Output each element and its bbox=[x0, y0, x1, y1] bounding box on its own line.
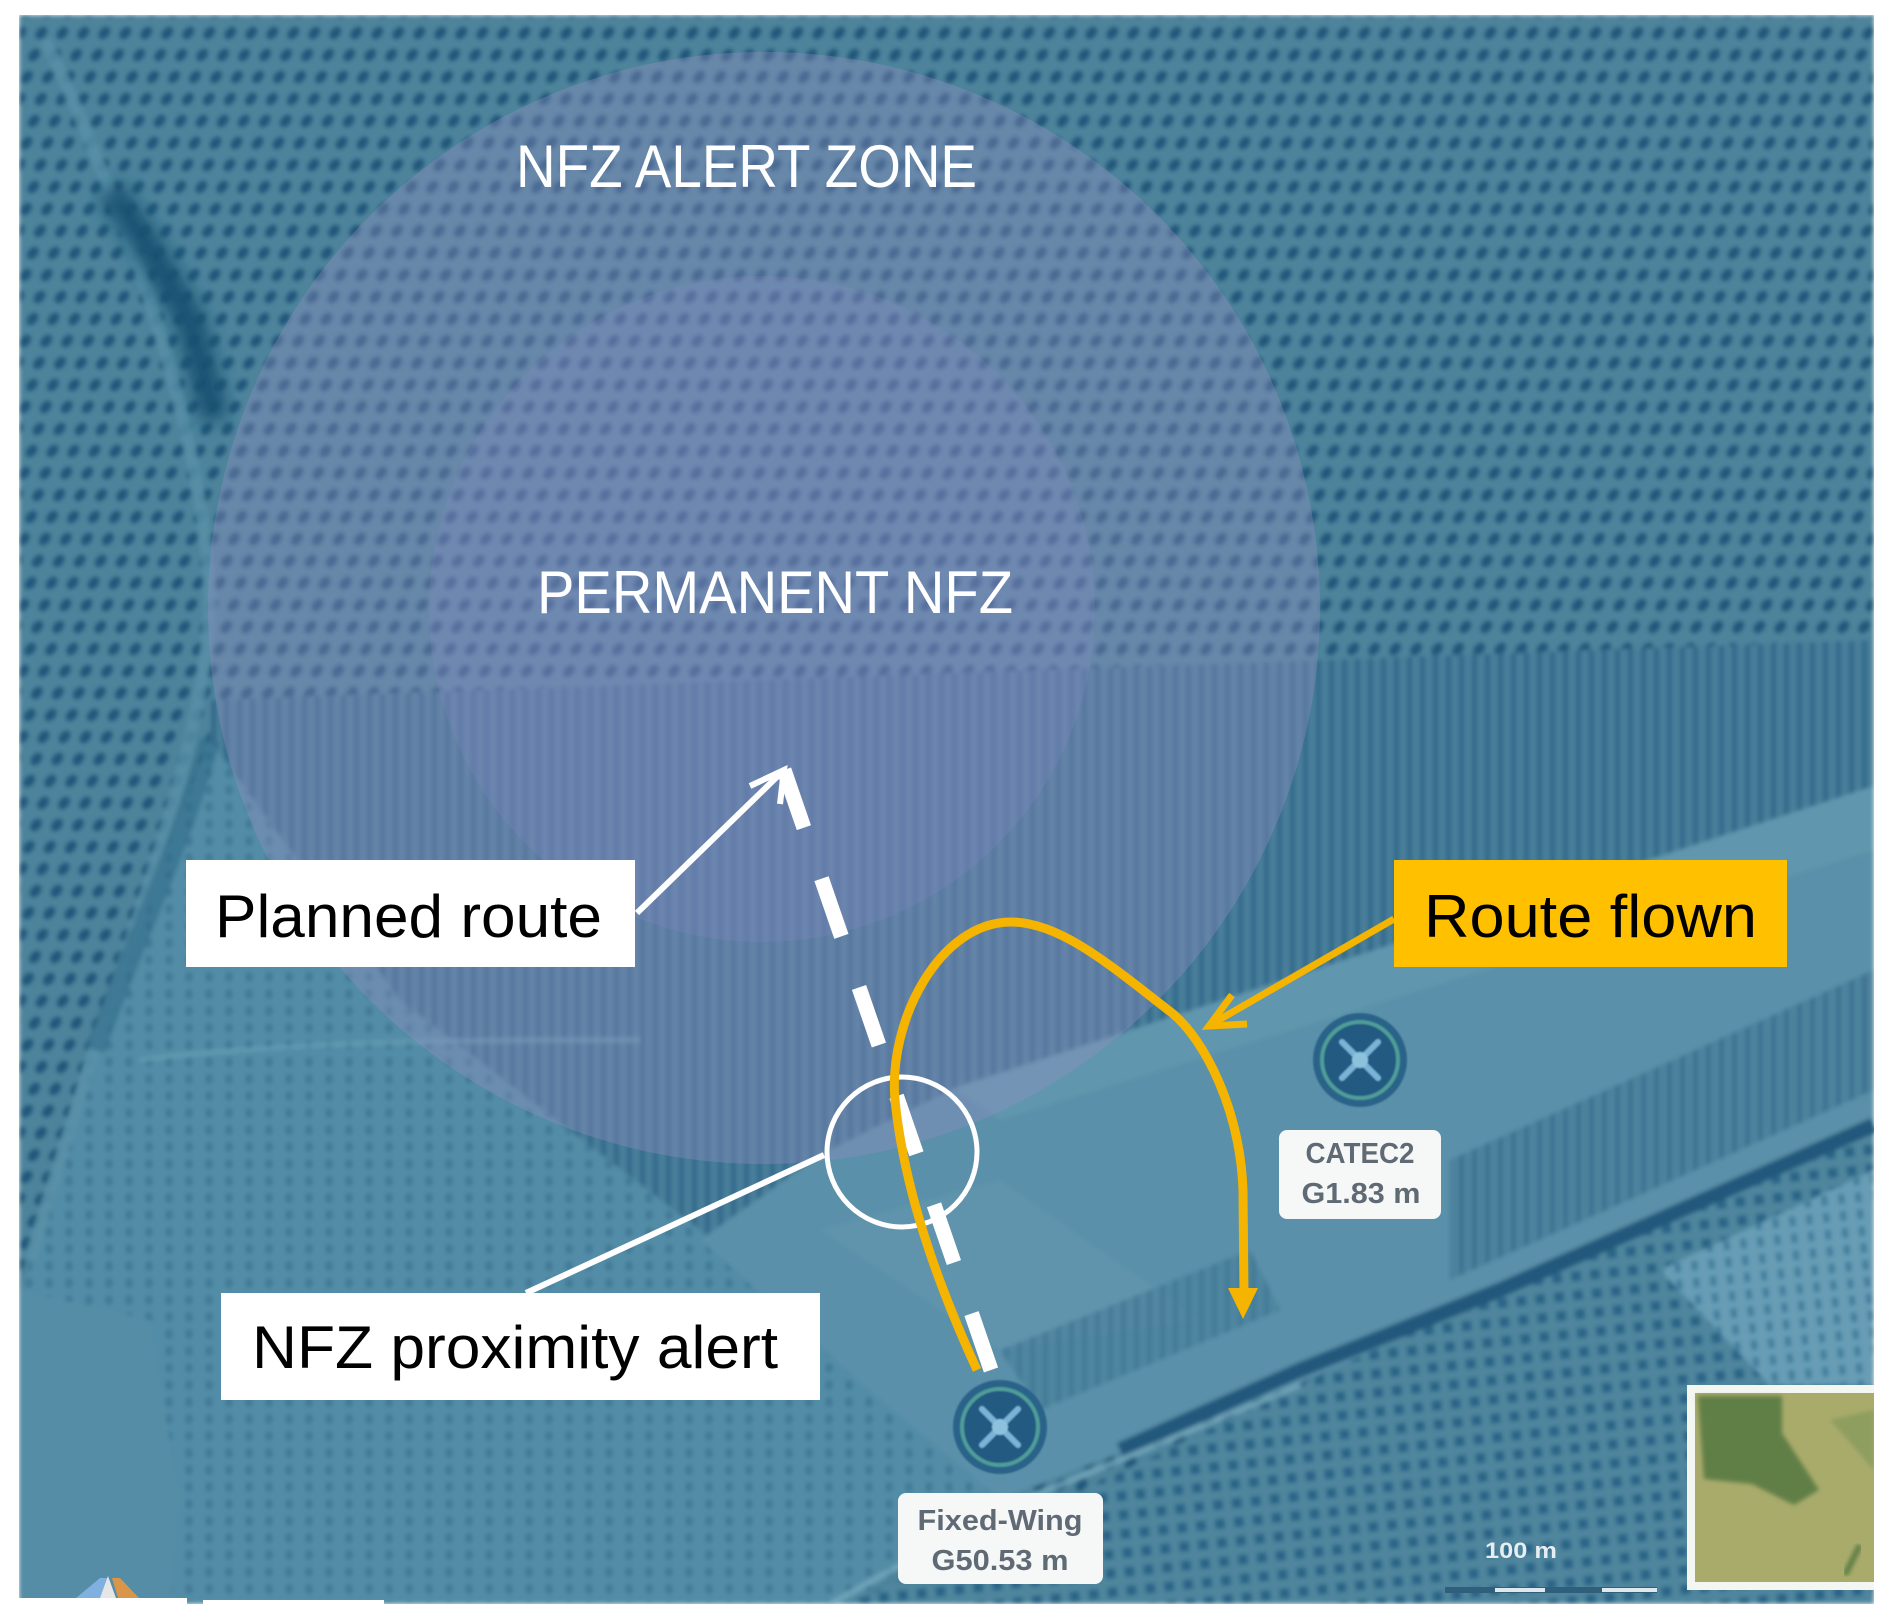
inset satellite minimap bbox=[1687, 1385, 1877, 1590]
label: Fixed-Wing altitude bbox=[898, 1493, 1103, 1584]
route flown curve with arrowhead bbox=[894, 922, 1258, 1370]
scale bar: 100 m: 100 m bbox=[1485, 1538, 1557, 1563]
label: CATEC2 altitude: CATEC2 bbox=[1306, 1138, 1414, 1170]
planned route dashed line bbox=[784, 770, 991, 1370]
icon: drone CATEC2 bbox=[1313, 1013, 1407, 1107]
arrow: planned route pointer bbox=[637, 770, 784, 913]
label: Fixed-Wing altitude: G50.53 m bbox=[932, 1545, 1068, 1577]
label: NFZ proximity alert: NFZ proximity alert bbox=[252, 1314, 778, 1381]
label: CATEC2 altitude: G1.83 m bbox=[1302, 1178, 1420, 1210]
label: planned route bbox=[186, 860, 635, 967]
label: Fixed-Wing altitude: Fixed-Wing bbox=[918, 1505, 1082, 1537]
label: NFZ proximity alert bbox=[221, 1293, 820, 1400]
heading: NFZ alert zone: NFZ ALERT ZONE bbox=[516, 133, 977, 200]
icon: drone Fixed-Wing bbox=[953, 1380, 1047, 1474]
label: route flown bbox=[1394, 860, 1787, 967]
label: route flown: Route flown bbox=[1424, 883, 1757, 950]
proximity alert leader line bbox=[526, 1155, 824, 1293]
proximity alert circle bbox=[827, 1077, 977, 1227]
icon: map compass bbox=[19, 1576, 384, 1604]
zone: permanent NFZ bbox=[429, 276, 1095, 942]
label: planned route: Planned route bbox=[215, 883, 602, 950]
label: CATEC2 altitude bbox=[1279, 1130, 1441, 1219]
scale bar: 100 m bbox=[1445, 1538, 1657, 1593]
arrow: route flown pointer bbox=[1209, 919, 1394, 1026]
zone: NFZ alert zone bbox=[208, 52, 1320, 1164]
heading: permanent NFZ: PERMANENT NFZ bbox=[537, 559, 1013, 626]
